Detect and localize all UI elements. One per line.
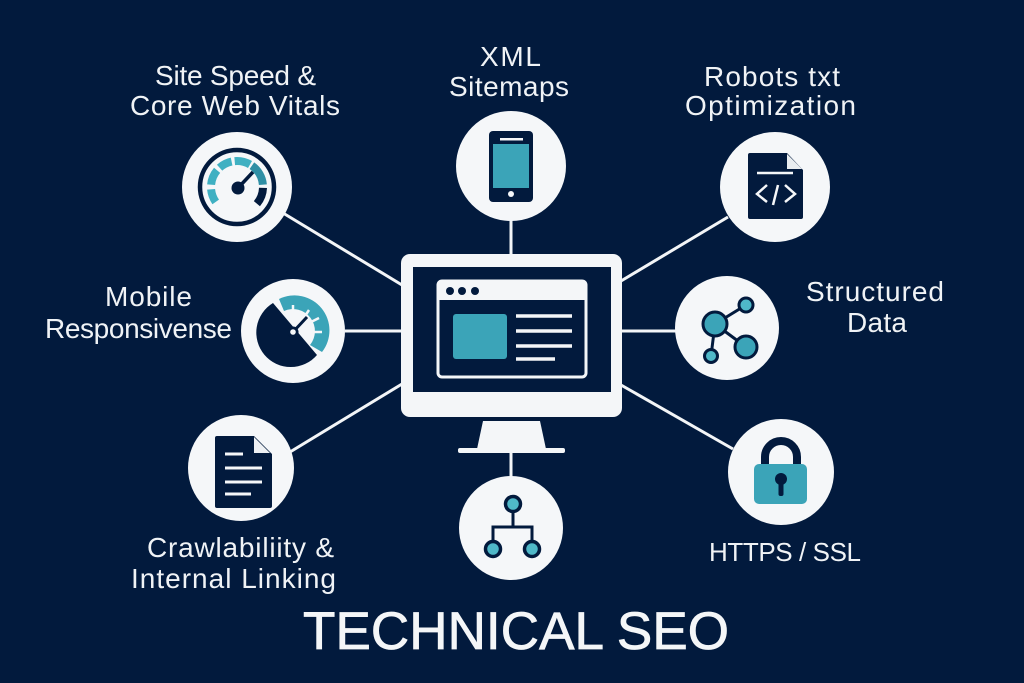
label: xml sitemaps [449,41,569,102]
label: robots txt: Robots txt [704,61,840,92]
label: structured data: Structured [806,276,944,307]
node: phone [456,111,566,221]
label: mobile: Mobile [105,281,192,312]
label: crawlability [131,532,336,594]
node: padlock [728,419,834,525]
label: xml sitemaps: Sitemaps [449,71,569,102]
node: structured data graph [675,276,779,380]
label: mobile: Responsivense [45,313,232,344]
label: https: HTTPS / SSL [709,537,861,567]
label: site speed: Core Web Vitals [130,90,340,121]
label: xml sitemaps: XML [480,41,541,72]
node: mobile responsiveness dial [241,279,345,383]
label: crawlability: Internal Linking [131,563,336,594]
title: TECHNICAL SEO [303,602,729,661]
label: site speed: Site Speed & [155,60,316,91]
node: robots file [720,132,830,242]
central monitor [401,254,622,453]
browser window [437,280,587,377]
label: crawlability: Crawlabiliity & [147,532,334,563]
label: site speed [130,60,340,121]
label: structured data: Data [847,307,907,338]
label: robots txt: Optimization [685,90,856,121]
node: hierarchy [459,476,563,580]
node: site speed gauge [182,132,292,242]
node: document [188,415,294,521]
connector lines [283,213,733,477]
label: robots txt [685,61,856,121]
label: structured data [806,276,944,338]
label: mobile [45,281,232,344]
